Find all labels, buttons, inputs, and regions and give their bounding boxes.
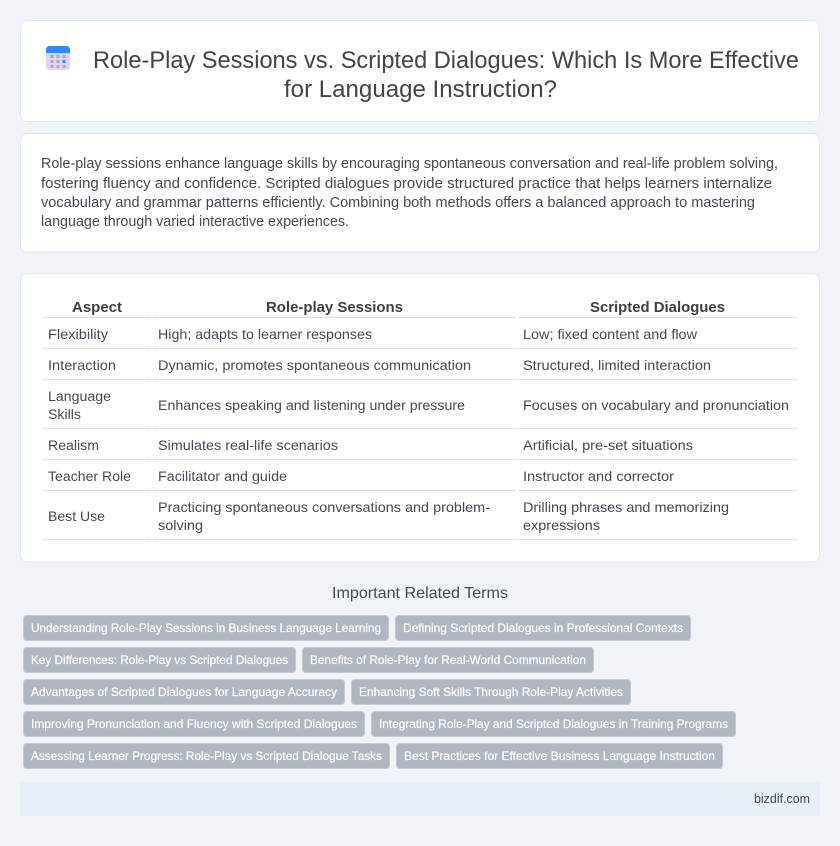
table row: best use — [48, 499, 729, 533]
table row: teacher role: Teacher Role — [48, 468, 131, 484]
tag — [24, 616, 388, 640]
title — [93, 47, 799, 103]
heading: important related terms: Important Related Terms — [332, 585, 508, 602]
tag: Enhancing Soft Skills Through Role-Play Activities — [359, 685, 623, 699]
tag — [396, 616, 690, 640]
table row: interaction: Structured, limited interaction — [523, 357, 711, 373]
tag — [24, 744, 390, 768]
tag: Improving Pronunciation and Fluency with Scripted Dialogues — [31, 717, 357, 731]
tag: Integrating Role-Play and Scripted Dialogues in Training Programs — [379, 717, 728, 731]
footer source text: bizdif.com — [754, 792, 810, 806]
table header row: Scripted Dialogues — [590, 299, 725, 316]
table row: realism: Realism — [48, 437, 99, 453]
tag: Understanding Role-Play Sessions in Business Language Learning — [31, 621, 381, 635]
tag — [352, 680, 630, 704]
panel: header — [20, 20, 820, 122]
tag — [24, 680, 344, 704]
table row: best use: Drilling phrases and memorizing — [523, 499, 729, 515]
table row: teacher role: Facilitator and guide — [158, 468, 287, 484]
table row: best use: expressions — [523, 517, 600, 533]
table row: language skills: Enhances speaking and listening under pressure — [158, 397, 465, 413]
tag — [24, 712, 364, 736]
table header row — [72, 299, 725, 316]
tag: Assessing Learner Progress: Role-Play vs Scripted Dialogue Tasks — [31, 749, 382, 763]
tag: Key Differences: Role-Play vs Scripted Dialogues — [31, 653, 288, 667]
table row: flexibility: High; adapts to learner responses — [158, 326, 372, 342]
icon: calendar — [46, 46, 70, 70]
table row: realism — [48, 437, 693, 453]
title: Role-Play Sessions vs. Scripted Dialogues: Which Is More Effective — [93, 47, 799, 74]
table header row: Aspect — [72, 299, 122, 316]
tag: Advantages of Scripted Dialogues for Language Accuracy — [31, 685, 337, 699]
table header row: Role-play Sessions — [266, 299, 403, 316]
table row: interaction — [48, 357, 711, 373]
tag: Defining Scripted Dialogues in Professional Contexts — [403, 621, 683, 635]
table row: realism: Artificial, pre-set situations — [523, 437, 693, 453]
footer — [20, 782, 820, 816]
text block: introduction paragraph: language through varied interactive experiences. — [41, 214, 349, 230]
table row: best use: Best Use — [48, 508, 105, 524]
table row: language skills: Language — [48, 388, 111, 404]
table row: flexibility: Low; fixed content and flow — [523, 326, 698, 342]
table: grid lines — [43, 318, 797, 540]
text block: introduction paragraph: Role-play sessions enhance language skills by encouraging spontaneous conversation and real-life problem solving, — [41, 156, 778, 172]
table row: teacher role: Instructor and corrector — [523, 468, 674, 484]
table row: flexibility: Flexibility — [48, 326, 108, 342]
tag — [372, 712, 736, 736]
title: for Language Instruction? — [284, 76, 557, 103]
tag — [24, 648, 296, 672]
text block: introduction paragraph: vocabulary and grammar patterns efficiently. Combining both methods offers a balanced approach to mastering — [41, 195, 755, 211]
table row: teacher role — [48, 468, 674, 484]
table row: language skills: Focuses on vocabulary and pronunciation — [523, 397, 789, 413]
tag — [302, 648, 594, 672]
table row: best use: Practicing spontaneous conversations and problem- — [158, 499, 490, 515]
tag — [396, 744, 722, 768]
text block: introduction paragraph: fostering fluency and confidence. Scripted dialogues provide structured practice that helps learners internalize — [41, 176, 772, 192]
table row: best use: solving — [158, 517, 203, 533]
table row: realism: Simulates real-life scenarios — [158, 437, 338, 453]
tag: Best Practices for Effective Business Language Instruction — [404, 749, 715, 763]
table row: interaction: Dynamic, promotes spontaneous communication — [158, 357, 471, 373]
text block: introduction paragraph — [41, 156, 778, 230]
tag: Benefits of Role-Play for Real-World Communication — [310, 653, 586, 667]
panel: introduction — [20, 134, 820, 252]
table row: flexibility — [48, 326, 698, 342]
table row: language skills — [48, 388, 789, 422]
panel: comparison table — [20, 274, 820, 562]
related terms tags — [24, 616, 736, 768]
table row: language skills: Skills — [48, 406, 81, 422]
table row: interaction: Interaction — [48, 357, 116, 373]
